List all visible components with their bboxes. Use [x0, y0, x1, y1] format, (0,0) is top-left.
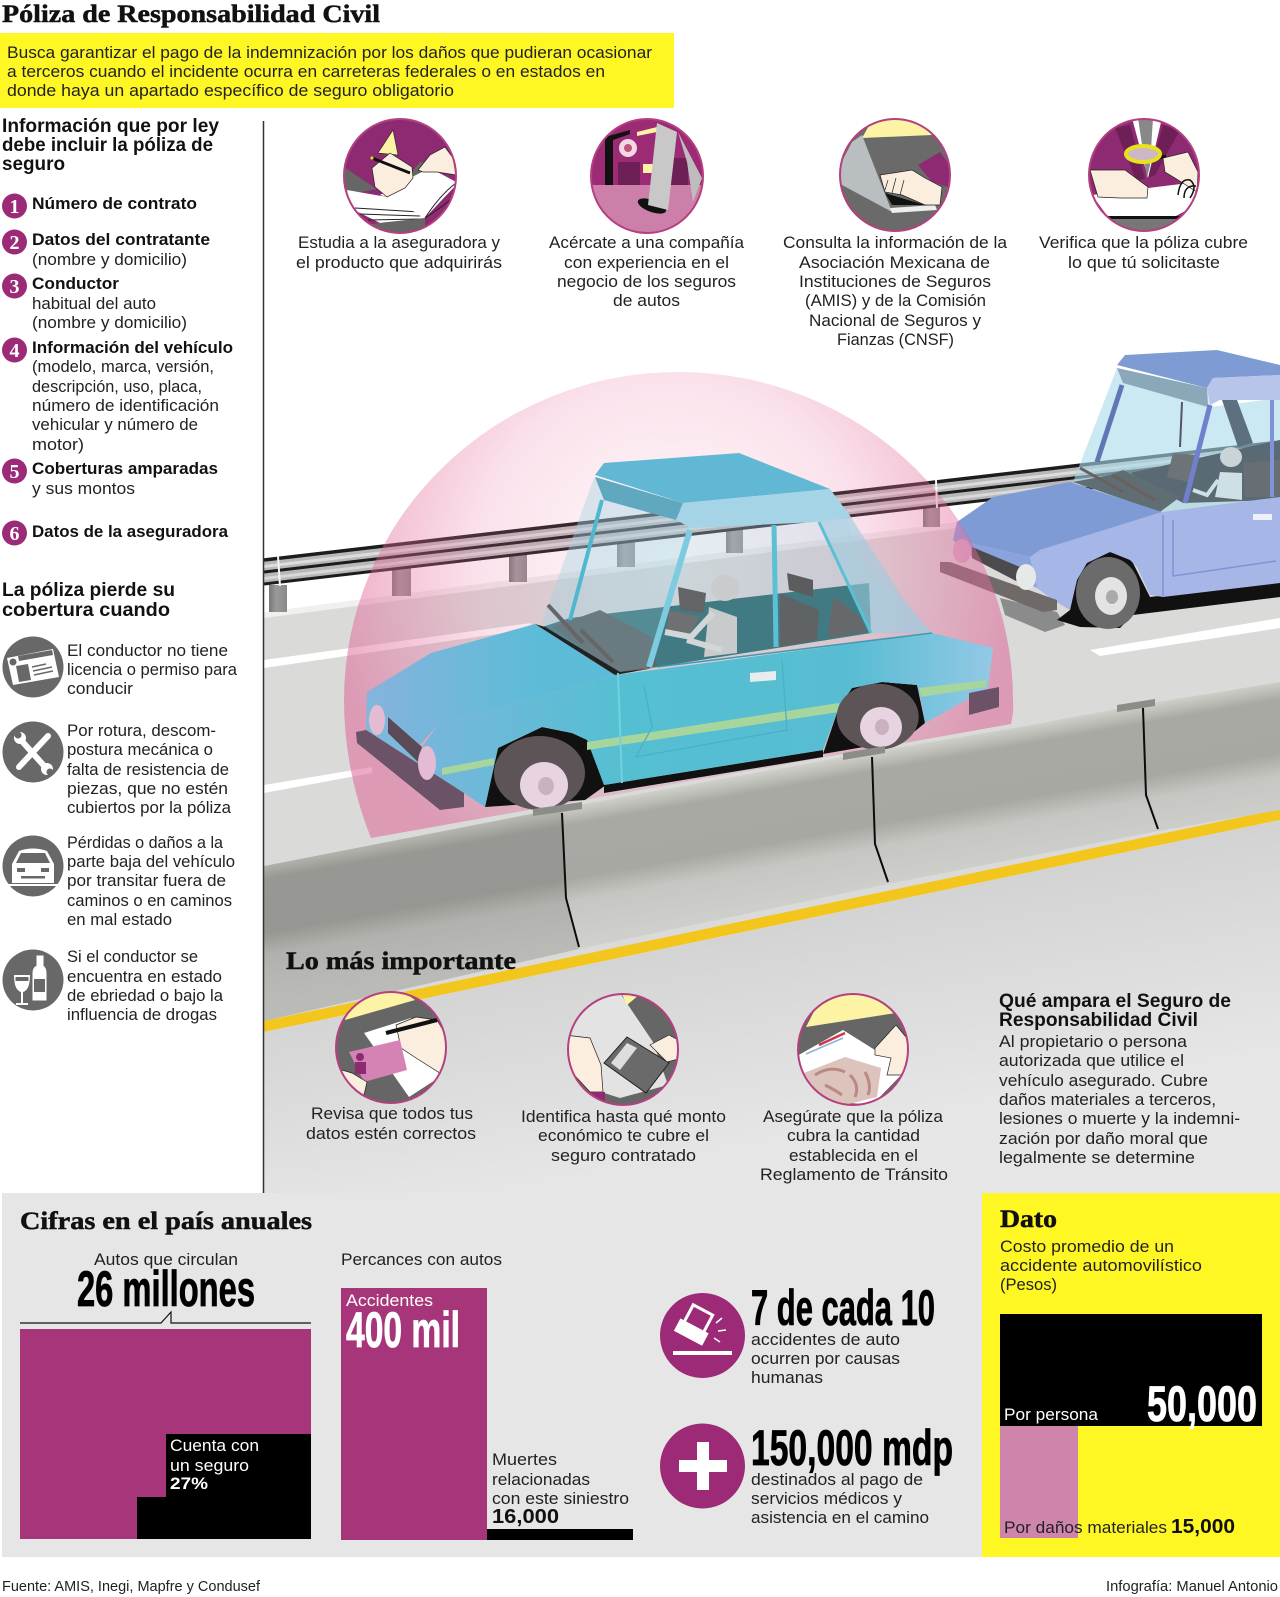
guard rail — [264, 442, 1280, 612]
item 6: 6 — [10, 523, 20, 545]
description: accidente automovilístico — [1000, 1256, 1202, 1275]
caption — [1039, 233, 1248, 272]
panel: annual figures — [2, 1193, 982, 1557]
text block: what the insurance covers: legalmente se determine — [999, 1148, 1195, 1167]
caption: Estudia a la aseguradora y — [298, 233, 500, 252]
icon: insurer office — [590, 118, 704, 234]
text: car underside: caminos o en caminos — [67, 891, 232, 910]
caption: Reglamento de Tránsito — [760, 1165, 948, 1184]
stat: 150,000 mdp: asistencia en el camino — [751, 1508, 929, 1527]
caption: Asegúrate que la póliza — [763, 1107, 944, 1126]
vertical divider — [262, 121, 264, 1193]
panel: dato — [982, 1193, 1280, 1557]
text: tools: falta de resistencia de — [67, 760, 229, 779]
caption: económico te cubre el — [538, 1126, 709, 1145]
icon: medical cross — [660, 1424, 745, 1508]
caption: seguro contratado — [551, 1146, 696, 1165]
item 4: (modelo, marca, versión, — [32, 357, 214, 376]
item 4: motor) — [32, 435, 84, 454]
item 4: 4 — [10, 340, 20, 362]
caption: Nacional de Seguros y — [809, 311, 982, 330]
panel: required policy information — [2, 116, 233, 546]
icon: ID card — [335, 991, 447, 1104]
step 1: study insurer — [296, 115, 502, 272]
tip 3: required amount — [760, 990, 948, 1184]
text: car underside: en mal estado — [67, 910, 172, 929]
caption: establecida en el — [789, 1146, 918, 1165]
chart: accidents and deaths: Accidentes — [346, 1291, 433, 1310]
text: car underside — [67, 833, 235, 929]
title: Póliza de Responsabilidad Civil — [2, 1, 380, 28]
description: Costo promedio de un — [1000, 1237, 1174, 1256]
intro callout: Busca garantizar el pago de la indemnización por los daños que pudieran ocasionar — [7, 43, 652, 62]
text: car underside: Pérdidas o daños a la — [67, 833, 224, 852]
item 5: 5 — [10, 461, 20, 483]
text block: what the insurance covers: lesiones o muerte y la indemni- — [999, 1109, 1240, 1128]
chart: accidents and deaths: relacionadas — [492, 1470, 590, 1489]
caption: (AMIS) y de la Comisión — [805, 291, 986, 310]
text: car underside: parte baja del vehículo — [67, 852, 235, 871]
caption: Consulta la información de la — [783, 233, 1008, 252]
text block: what the insurance covers — [999, 991, 1240, 1167]
description: (Pesos) — [1000, 1275, 1057, 1294]
text block: what the insurance covers: autorizada que utilice el — [999, 1051, 1184, 1070]
caption: Verifica que la póliza cubre — [1039, 233, 1248, 252]
chart: average cost: Por daños materiales — [1004, 1518, 1167, 1537]
caption — [306, 1104, 476, 1143]
stat: 150,000 mdp: 150,000 mdp — [751, 1420, 953, 1476]
pink protection dome — [344, 372, 1013, 838]
concrete barrier — [264, 682, 1280, 1021]
text block: what the insurance covers: daños materiales a terceros, — [999, 1090, 1216, 1109]
chart: average cost: 15,000 — [1171, 1516, 1235, 1538]
icon: magnifier over policy — [1088, 118, 1200, 232]
item 2: 2 — [10, 232, 20, 254]
item 4: número de identificación — [32, 396, 219, 415]
chart: accidents and deaths: Muertes — [492, 1450, 557, 1469]
icon: tools — [2, 722, 64, 782]
text: tools: Por rotura, descom- — [67, 721, 216, 740]
item 6: Datos de la aseguradora — [32, 522, 229, 541]
caption: lo que tú solicitaste — [1068, 253, 1220, 272]
text: licence: conducir — [67, 679, 133, 698]
caption: Acércate a una compañía — [549, 233, 745, 252]
item 3: Conductor — [32, 274, 119, 293]
stat: 7 of 10: ocurren por causas — [751, 1349, 900, 1368]
intro callout: donde haya un apartado específico de seguro obligatorio — [7, 81, 454, 100]
icon: car underside — [2, 836, 64, 896]
text: tools — [67, 721, 232, 817]
item 3 — [2, 274, 187, 332]
text: licence — [67, 641, 238, 698]
item 4: descripción, uso, placa, — [32, 377, 202, 396]
stat: 7 of 10: humanas — [751, 1368, 823, 1387]
chart: accidents and deaths: con este siniestro — [492, 1489, 629, 1508]
item 5: Coberturas amparadas — [32, 459, 218, 478]
text: wine and bottle: influencia de drogas — [67, 1005, 217, 1024]
caption: el producto que adquirirás — [296, 253, 502, 272]
item 1: 1 — [10, 196, 20, 218]
heading: debe incluir la póliza de — [2, 135, 213, 156]
heading: Dato — [1000, 1206, 1057, 1233]
chart: average cost: Por persona — [1004, 1405, 1099, 1424]
chart: accidents and deaths: Percances con autos — [341, 1250, 502, 1269]
text block: what the insurance covers: Al propietario o persona — [999, 1032, 1188, 1051]
credit: Infografía: Manuel Antonio — [1106, 1578, 1278, 1595]
item 2: (nombre y domicilio) — [32, 250, 187, 269]
description — [1000, 1237, 1202, 1294]
step 3: consult AMIS — [783, 115, 1008, 349]
caption: Instituciones de Seguros — [799, 272, 991, 291]
heading: La póliza pierde su — [2, 580, 175, 601]
heading — [2, 580, 175, 621]
tip 1: check data — [306, 985, 476, 1143]
lower road — [264, 820, 1280, 1193]
text: wine and bottle: Si el conductor se — [67, 947, 198, 966]
text: tools: cubiertos por la póliza — [67, 798, 232, 817]
item 3: habitual del auto — [32, 294, 156, 313]
text: tools: piezas, que no estén — [67, 779, 228, 798]
text block: what the insurance covers: zación por daño moral que — [999, 1129, 1208, 1148]
yellow road line — [264, 809, 1280, 1032]
heading: Información que por ley — [2, 116, 219, 137]
caption — [296, 233, 502, 272]
intro callout: a terceros cuando el incidente ocurra en carreteras federales o en estados en — [7, 62, 605, 81]
icon: policy and banknote — [797, 993, 909, 1106]
stat: 7 of 10: 7 de cada 10 — [751, 1280, 935, 1336]
source: Fuente: AMIS, Inegi, Mapfre y Condusef — [2, 1578, 261, 1595]
caption — [521, 1107, 726, 1165]
panel: coverage lost — [2, 580, 238, 1024]
item 4: Información del vehículo — [32, 338, 233, 357]
stat: 150,000 mdp: destinados al pago de — [751, 1470, 923, 1489]
item 6 — [2, 520, 229, 546]
road lane dashes — [264, 618, 1280, 793]
caption: Identifica hasta qué monto — [521, 1107, 726, 1126]
icon: calculator — [567, 993, 679, 1106]
tip 2: amount covered — [521, 990, 726, 1165]
text: tools: postura mecánica o — [67, 740, 213, 759]
stat: 7 of 10: accidentes de auto — [751, 1330, 900, 1349]
text block: what the insurance covers: vehículo asegurado. Cubre — [999, 1071, 1208, 1090]
chart: cars in circulation: Autos que circulan — [94, 1250, 238, 1269]
stat: 150,000 mdp: servicios médicos y — [751, 1489, 903, 1508]
caption — [549, 233, 745, 310]
heading — [2, 116, 219, 175]
icon: overturned car — [660, 1293, 745, 1378]
item 5 — [2, 458, 218, 498]
heading: seguro — [2, 154, 65, 175]
chart: cars in circulation — [20, 1250, 311, 1539]
blue car — [940, 350, 1280, 632]
item 3: (nombre y domicilio) — [32, 313, 187, 332]
chart: cars in circulation: 27% — [170, 1474, 208, 1493]
text: wine and bottle: encuentra en estado — [67, 967, 222, 986]
step 2: approach a company — [549, 115, 745, 310]
caption: Fianzas (CNSF) — [837, 330, 954, 349]
text: wine and bottle: de ebriedad o bajo la — [67, 986, 224, 1005]
caption: negocio de los seguros — [557, 272, 736, 291]
text: licence: El conductor no tiene — [67, 641, 228, 660]
caption: con experiencia en el — [564, 253, 729, 272]
chart: cars in circulation: Cuenta con — [170, 1436, 259, 1455]
caption: datos estén correctos — [306, 1124, 476, 1143]
chart: cars in circulation: un seguro — [170, 1456, 249, 1475]
heading: most important: Lo más importante — [286, 948, 516, 975]
text: car underside: por transitar fuera de — [67, 871, 226, 890]
text: licence: licencia o permiso para — [67, 660, 238, 679]
heading: cobertura cuando — [2, 600, 170, 621]
item 4 — [2, 338, 233, 454]
road surface — [264, 480, 1280, 1025]
text block: what the insurance covers: Qué ampara el Seguro de — [999, 991, 1231, 1012]
caption: Revisa que todos tus — [311, 1104, 473, 1123]
item 2 — [2, 230, 210, 269]
caption — [783, 233, 1008, 349]
item 1 — [2, 194, 197, 218]
caption: cubra la cantidad — [787, 1126, 920, 1145]
caption: Asociación Mexicana de — [799, 253, 990, 272]
step 4: verify policy — [1039, 115, 1248, 272]
icon: hands on laptop — [839, 118, 951, 232]
illustration: road scene with two cars — [264, 350, 1280, 1193]
item 1: Número de contrato — [32, 194, 197, 213]
caption: de autos — [613, 291, 680, 310]
stat: 150,000 mdp — [751, 1420, 953, 1527]
intro callout — [0, 33, 674, 108]
icon: wine and bottle — [2, 950, 64, 1010]
chart: accidents and deaths — [341, 1250, 633, 1540]
teal car — [356, 453, 999, 810]
item 5: y sus montos — [32, 479, 135, 498]
text block: what the insurance covers: Responsabilidad Civil — [999, 1010, 1198, 1031]
chart: accidents and deaths: 400 mil — [346, 1302, 460, 1358]
chart: cars in circulation: 26 millones — [77, 1261, 255, 1317]
text: wine and bottle — [67, 947, 224, 1024]
stat: 7 of 10 — [751, 1280, 935, 1387]
item 3: 3 — [10, 276, 20, 298]
icon: licence — [2, 636, 64, 698]
item 4: vehicular y número de — [32, 415, 198, 434]
item 2: Datos del contratante — [32, 230, 210, 249]
caption — [760, 1107, 948, 1184]
icon: hands on book — [343, 118, 457, 234]
chart: average cost — [1000, 1314, 1262, 1538]
chart: accidents and deaths: 16,000 — [492, 1506, 559, 1528]
heading: Cifras en el país anuales — [20, 1208, 312, 1235]
